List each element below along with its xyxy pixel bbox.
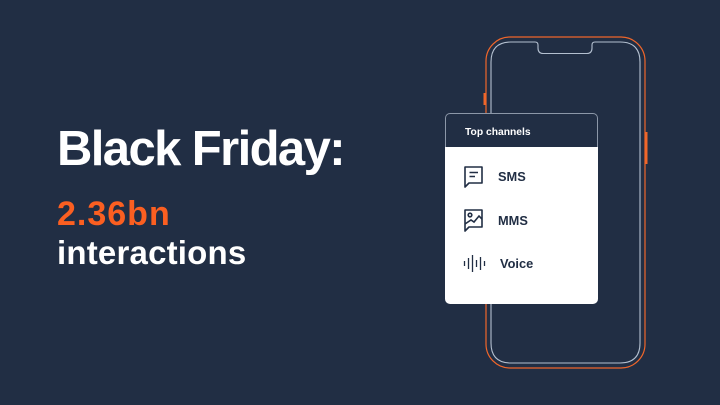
label: MMS: MMS: [498, 213, 528, 228]
icon: voice waveform: [464, 255, 486, 272]
icon: mms: [464, 209, 483, 232]
label: Voice: Voice: [500, 256, 533, 271]
label: SMS: SMS: [498, 169, 526, 184]
panel: top channels: [445, 113, 598, 304]
title: Black Friday:: [57, 122, 344, 176]
panel heading: Top channels: [465, 127, 531, 138]
panel header: [445, 113, 598, 148]
subtitle: interactions: interactions: [57, 234, 246, 271]
icon: sms: [464, 166, 483, 188]
stat: 2.36bn: 2.36bn: [57, 195, 171, 233]
panel body: [445, 147, 598, 304]
